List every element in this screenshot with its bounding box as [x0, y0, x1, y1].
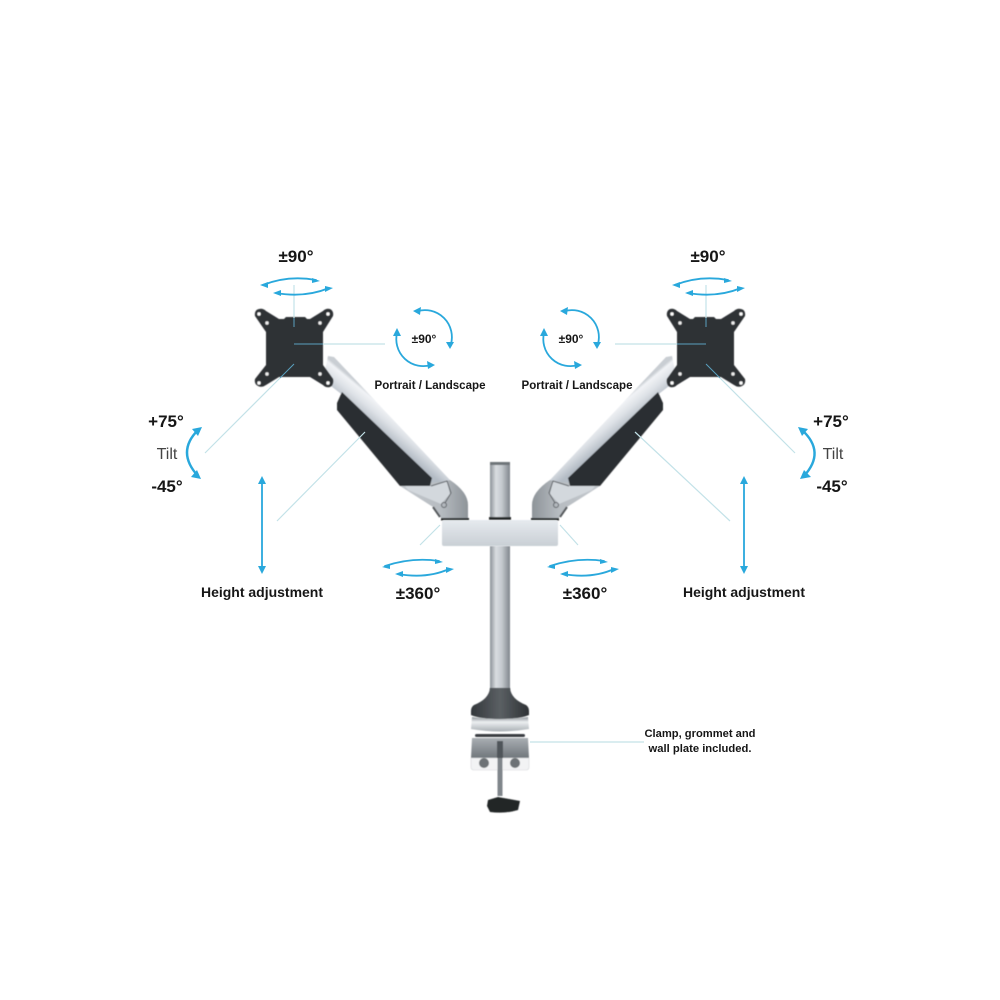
- label: right top rotation: ±90°: [690, 247, 726, 266]
- left tilt arrow: [187, 427, 202, 479]
- central pole: [489, 462, 511, 690]
- label: clamp note second line: wall plate included.: [647, 743, 752, 755]
- label: left tilt down: -45°: [151, 477, 183, 496]
- left portrait rotation arrows: [393, 307, 454, 369]
- label: left top rotation: ±90°: [278, 247, 314, 266]
- right base swivel arrows: [547, 559, 619, 577]
- label: left tilt: Tilt: [157, 446, 178, 463]
- label: right tilt down: -45°: [816, 477, 848, 496]
- left height arrow: [258, 476, 266, 574]
- left monitor arm: [323, 356, 469, 520]
- left mounting plate: [255, 309, 333, 387]
- left swivel arrows: [260, 278, 333, 296]
- leader lines: [205, 285, 795, 742]
- clamp base: [471, 688, 529, 813]
- label: right portrait landscape: Portrait / Landscape: [522, 378, 633, 392]
- crossbar: [442, 520, 558, 546]
- label: left tilt up: +75°: [148, 412, 184, 431]
- right portrait rotation arrows: [540, 307, 601, 369]
- label: right tilt: Tilt: [823, 446, 844, 463]
- label: right tilt up: +75°: [813, 412, 849, 431]
- right height arrow: [740, 476, 748, 574]
- label: clamp note: Clamp, grommet and: [644, 728, 756, 740]
- right mounting plate: [667, 309, 745, 387]
- label: right base rotation: ±360°: [563, 584, 607, 603]
- right swivel arrows: [672, 278, 745, 296]
- label: left base rotation: ±360°: [396, 584, 440, 603]
- label: left portrait rotation value: ±90°: [412, 332, 437, 346]
- label: left height adjustment: Height adjustment: [201, 584, 323, 600]
- right monitor arm: [531, 356, 677, 520]
- right tilt arrow: [798, 427, 815, 479]
- label: left portrait landscape: Portrait / Landscape: [374, 378, 486, 392]
- label: right portrait rotation value: ±90°: [559, 332, 584, 346]
- left base swivel arrows: [382, 559, 454, 577]
- label: right height adjustment: Height adjustment: [683, 584, 805, 600]
